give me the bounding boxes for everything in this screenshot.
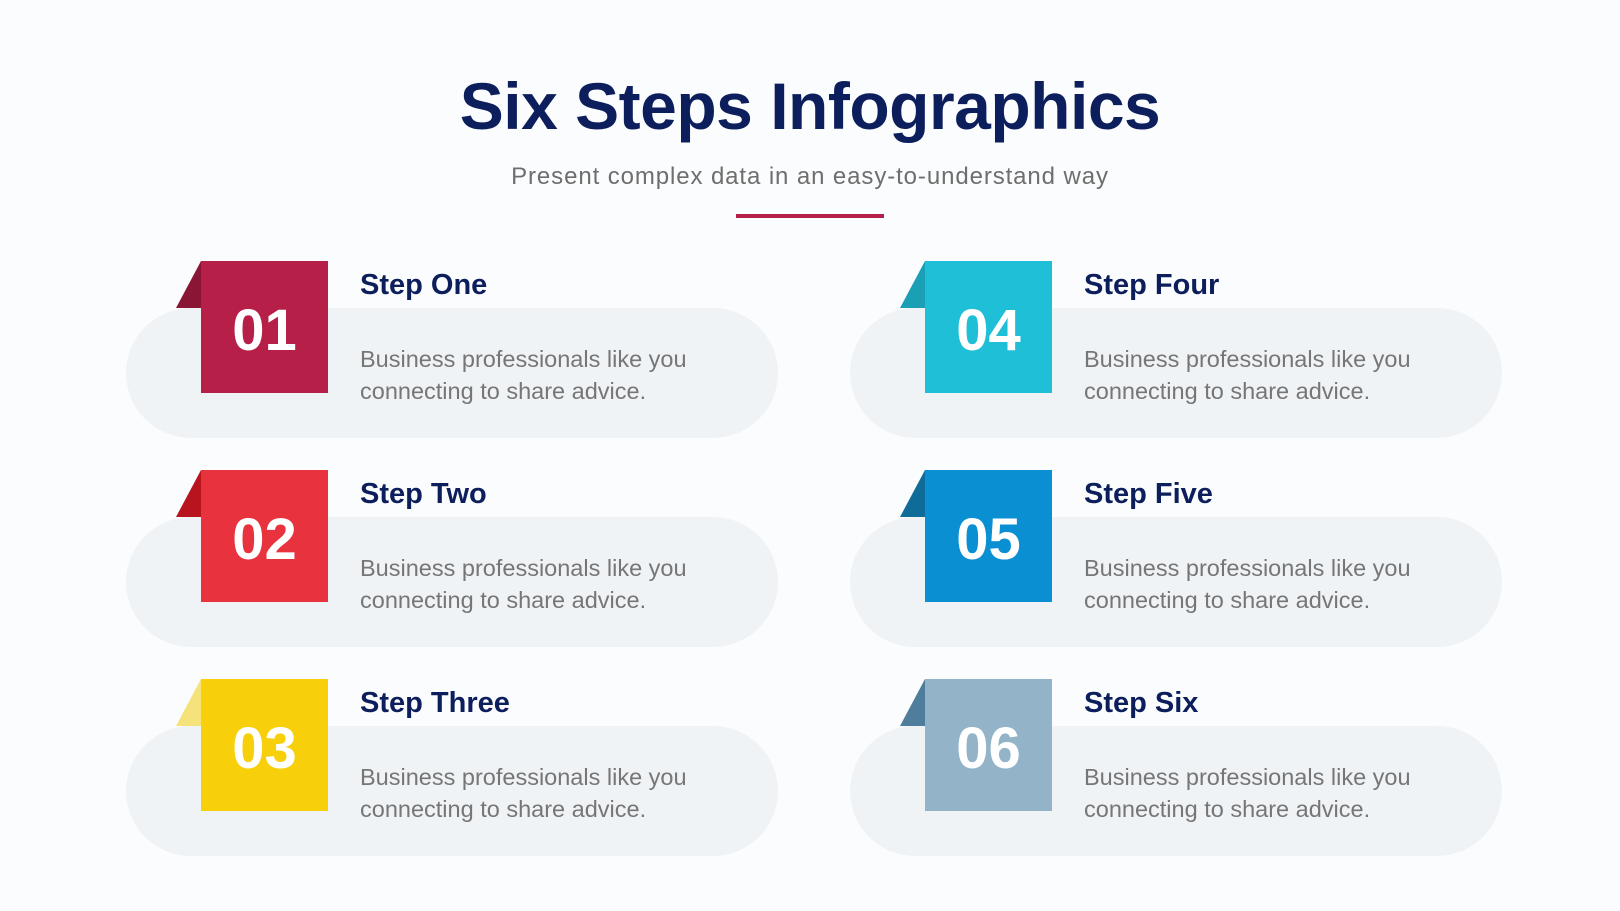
number 06 (925, 679, 1052, 811)
heading: Step Two (360, 478, 487, 510)
description (360, 555, 687, 613)
heading: Step Five (1084, 478, 1213, 510)
description: Business professionals like you (1084, 764, 1411, 790)
number 01 (201, 261, 328, 393)
number 01: 01 (232, 298, 297, 362)
title: Six Steps Infographics (460, 69, 1160, 143)
number 06: 06 (956, 716, 1021, 780)
description: connecting to share advice. (1084, 796, 1370, 822)
description (1084, 555, 1411, 613)
description: connecting to share advice. (360, 587, 646, 613)
description: connecting to share advice. (1084, 587, 1370, 613)
accent line (736, 214, 884, 218)
step 03 (126, 679, 778, 856)
step 02 (126, 470, 778, 647)
description: Business professionals like you (1084, 346, 1411, 372)
description: Business professionals like you (360, 555, 687, 581)
description (1084, 764, 1411, 822)
number 03 (201, 679, 328, 811)
heading: Step Three (360, 687, 510, 719)
description (360, 346, 687, 404)
number 05 (925, 470, 1052, 602)
subtitle: Present complex data in an easy-to-understand way (511, 163, 1109, 190)
step 04 (850, 261, 1502, 438)
step 05 (850, 470, 1502, 647)
heading: Step Six (1084, 687, 1198, 719)
number 02 (201, 470, 328, 602)
heading: Step One (360, 269, 487, 301)
number 03: 03 (232, 716, 297, 780)
description (1084, 346, 1411, 404)
description: connecting to share advice. (1084, 378, 1370, 404)
step 06 (850, 679, 1502, 856)
step 01 (126, 261, 778, 438)
description: Business professionals like you (360, 346, 687, 372)
number 04 (925, 261, 1052, 393)
description (360, 764, 687, 822)
description: Business professionals like you (1084, 555, 1411, 581)
description: connecting to share advice. (360, 378, 646, 404)
number 05: 05 (956, 506, 1021, 572)
number 02: 02 (232, 506, 297, 572)
description: connecting to share advice. (360, 796, 646, 822)
heading: Step Four (1084, 269, 1219, 301)
description: Business professionals like you (360, 764, 687, 790)
number 04: 04 (956, 298, 1021, 362)
